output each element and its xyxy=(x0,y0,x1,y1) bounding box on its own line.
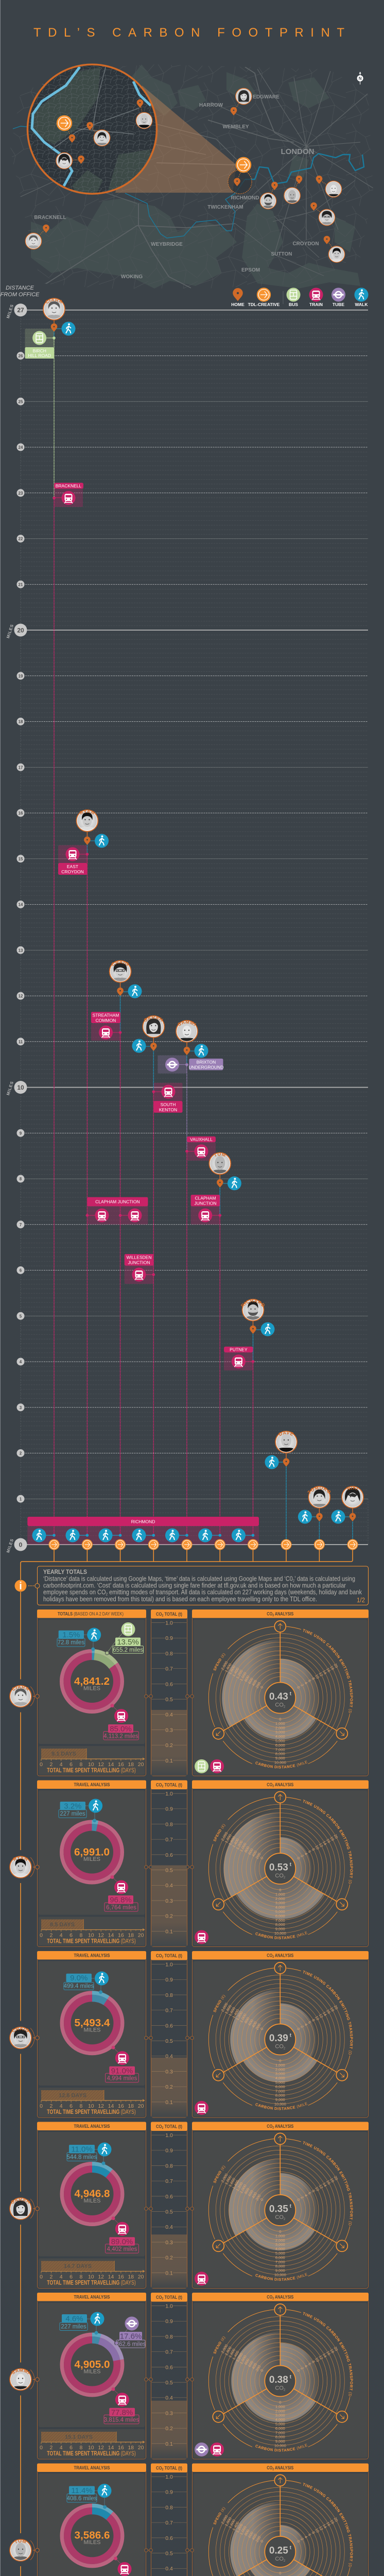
mile markers: 15 xyxy=(19,857,23,861)
avatar: CRAIG xyxy=(12,2027,29,2032)
magnifier circle xyxy=(26,62,160,196)
time bar: 8.5 DAYS xyxy=(50,1922,75,1928)
avatar xyxy=(9,2533,39,2566)
polar chart xyxy=(208,2133,354,2282)
column: CO2 total 0.53 xyxy=(151,1791,187,1946)
callout: walk: 227 miles xyxy=(61,2324,86,2330)
mile markers: MILES xyxy=(6,1538,14,1553)
person: Richard route: RICHARD xyxy=(241,1299,265,1308)
row: Ciara: 2 xyxy=(162,1615,164,1618)
TDL office markers xyxy=(57,115,251,173)
person: Dave route xyxy=(265,1431,298,1469)
row: Ciara: CO xyxy=(267,1612,274,1617)
callout: tube xyxy=(114,2316,146,2348)
column: CO2 total 0.43 xyxy=(151,1620,187,1776)
polar chart: t xyxy=(290,1691,292,1697)
person: Tom route: TOM xyxy=(213,1153,225,1157)
row: Sarah: ANALYSIS xyxy=(274,2124,293,2129)
person: Craig route: STREATHAM xyxy=(93,1013,119,1018)
map place labels: HARROW xyxy=(199,103,223,108)
info box: yearly totals: 2 xyxy=(293,1580,294,1583)
polar chart xyxy=(208,1962,354,2111)
polar chart: 0.38 xyxy=(269,2375,288,2385)
callout: train: 77.8% xyxy=(111,2408,133,2417)
row: Tom: ANALYSIS xyxy=(274,2465,293,2470)
row: Tom: 2 xyxy=(162,2468,164,2471)
callout: train: 3,815.4 miles xyxy=(104,2417,139,2424)
mile markers: 26 xyxy=(19,353,23,359)
axis heading: distance from office xyxy=(1,285,40,298)
map avatars xyxy=(25,88,345,263)
person: Dave route: DAVE xyxy=(278,1431,293,1436)
polar chart: t xyxy=(290,2033,292,2038)
icon: north compass: N xyxy=(359,76,362,81)
person: Ryan route: CROYDON xyxy=(61,869,84,874)
donut chart: 5,493.4 xyxy=(74,2018,110,2029)
polar chart: 0.43 xyxy=(269,1691,288,1702)
time bar xyxy=(40,2090,144,2115)
legend: HOME xyxy=(231,302,245,307)
mile markers: 16 xyxy=(19,811,23,816)
donut chart: 3,586.6 xyxy=(74,2530,110,2541)
donut chart: MILES xyxy=(83,1686,100,1692)
row: Sarah: CO xyxy=(156,2124,163,2129)
mode icons xyxy=(195,2443,224,2456)
donut chart xyxy=(62,1822,122,1883)
person: Ciara route: CIARA xyxy=(45,299,62,304)
mile markers: 25 xyxy=(19,399,23,404)
station: Clapham Junction shared xyxy=(86,1197,148,1225)
callout: walk xyxy=(60,2312,104,2335)
map place labels xyxy=(34,94,319,280)
mile markers: 20 xyxy=(17,626,24,634)
polar chart: 0.53 xyxy=(269,1862,288,1873)
mile markers: 6 xyxy=(20,1268,22,1273)
legend: BUS xyxy=(289,302,298,307)
callout: train xyxy=(106,2216,138,2253)
column: CO2 total 0.38 xyxy=(151,2303,187,2459)
person: Ryan route xyxy=(58,809,109,875)
polar chart: t xyxy=(290,2374,292,2380)
callout: walk: 4.6% xyxy=(65,2314,83,2324)
row: Tom: CO xyxy=(267,2465,274,2470)
person: Ryan route: EAST xyxy=(67,864,78,869)
mile markers: 27 xyxy=(17,307,24,314)
row: Sarah: CO xyxy=(267,2124,274,2129)
person: Sammi route xyxy=(158,1020,223,1161)
TDL office markers on axis xyxy=(48,1539,358,1550)
callout: walk: 72.8 miles xyxy=(58,1639,84,1646)
arrow: connector from office to panels xyxy=(21,1550,353,2576)
row: Sarah: 2 xyxy=(162,2127,164,2130)
time bar: 15.1 DAYS xyxy=(65,2434,93,2440)
person: Ciara route xyxy=(25,298,83,507)
row: Craig: CO xyxy=(156,1953,163,1958)
callout: train: 4,402 miles xyxy=(107,2246,137,2252)
row: Craig: 2 xyxy=(272,1956,274,1959)
row: Ryan: ANALYSIS xyxy=(274,1782,293,1787)
map pins and dotted links xyxy=(33,96,337,254)
person: Tom route: CLAPHAM xyxy=(195,1195,216,1200)
mile markers: 10 xyxy=(17,1084,24,1091)
row: Sarah xyxy=(9,2122,369,2289)
callout: train xyxy=(103,1704,138,1740)
polar chart xyxy=(208,1791,354,1940)
time bar: 14.7 DAYS xyxy=(64,2263,92,2269)
donut chart xyxy=(62,2505,123,2566)
row: Sammi: TOTAL (t) xyxy=(163,2295,182,2300)
avatar: SAMMI xyxy=(11,2369,30,2374)
polar chart: CO xyxy=(275,2214,284,2221)
row: Sammi: 2 xyxy=(162,2298,164,2301)
polar chart: 0.39 xyxy=(269,2033,288,2044)
polar chart: 2 xyxy=(284,2560,286,2563)
mile markers: 9 xyxy=(20,1131,22,1136)
callout: walk xyxy=(67,2142,111,2165)
callout: walk xyxy=(59,1799,102,1822)
map place labels: WEMBLEY xyxy=(222,124,249,130)
dotted zoom circle: Richmond xyxy=(228,170,252,194)
heading: TRAVEL ANALYSIS xyxy=(74,1953,110,1958)
avatar: TOM xyxy=(14,2539,27,2544)
icon: info: i xyxy=(19,1581,22,1592)
person: Sarah route xyxy=(125,1015,182,1284)
row: Ciara xyxy=(9,1609,369,1776)
callout: walk: 11.0% xyxy=(71,2145,93,2154)
callout: train: 6,764 miles xyxy=(106,1905,136,1911)
callout: train: 85.0% xyxy=(110,1725,132,1733)
person: Sarah route: JUNCTION xyxy=(128,1260,150,1265)
mode icon xyxy=(195,1930,208,1944)
title: TDL’S CARBON FOOTPRINT xyxy=(33,26,344,40)
avatar xyxy=(9,1680,40,1713)
polar chart: 2 xyxy=(284,2388,286,2392)
row: Ryan: TOTAL (t) xyxy=(163,1783,182,1788)
callout: train xyxy=(108,2556,141,2576)
info box: yearly totals: holidays have been removed from this total) and is based on each employee travelling only to the TDL office. xyxy=(43,1596,317,1603)
axis heading: distance from office: DISTANCE xyxy=(6,285,34,291)
avatar xyxy=(9,1850,40,1883)
callout: walk xyxy=(57,1628,101,1651)
row: Sarah: 2 xyxy=(272,2127,274,2130)
callout: walk xyxy=(64,1971,109,1994)
mile markers: 2 xyxy=(20,1451,22,1456)
avatar xyxy=(9,2021,40,2054)
row: Ryan: CO xyxy=(267,1782,274,1787)
mile markers: 11 xyxy=(19,1040,23,1044)
callout: train xyxy=(104,1875,138,1911)
map place labels: LONDON xyxy=(281,147,314,156)
callout: walk: 9.0% xyxy=(70,1974,88,1982)
map place labels: RICHMOND xyxy=(231,195,259,201)
row: Craig: 2 xyxy=(162,1956,164,1959)
callout: train: 4,994 miles xyxy=(107,2075,137,2081)
mile markers: 13 xyxy=(19,948,23,953)
mile markers: 22 xyxy=(19,537,23,541)
polar chart: 2 xyxy=(284,1876,286,1879)
transport routes xyxy=(54,330,353,1545)
row: Ciara: ANALYSIS xyxy=(274,1612,293,1617)
row: Sammi xyxy=(9,2293,369,2460)
mode icons xyxy=(195,1759,224,1773)
callout: walk: 3.2% xyxy=(64,1802,81,1810)
avatar: RYAN xyxy=(13,1856,28,1861)
callout: walk: 227 miles xyxy=(60,1811,85,1817)
polar chart: CO xyxy=(275,2385,284,2392)
map place labels: WEYBRIDGE xyxy=(151,242,183,247)
map place labels: CROYDON xyxy=(292,241,319,247)
column: CO2 total 0.25 xyxy=(151,2474,187,2576)
row: Tom xyxy=(9,2464,369,2576)
polar chart: 0.35 xyxy=(269,2204,288,2214)
callout: walk: 499.4 miles xyxy=(64,1984,94,1990)
mile markers: 8 xyxy=(20,1177,22,1181)
donut chart: MILES xyxy=(83,2027,101,2033)
legend: WALK xyxy=(355,302,368,307)
distance grid xyxy=(21,310,368,1545)
polar chart xyxy=(208,2304,354,2452)
polar chart: 0.25 xyxy=(269,2545,288,2556)
mile markers: 1 xyxy=(20,1497,22,1501)
axis heading: distance from office: FROM OFFICE xyxy=(1,292,40,298)
person: Craig route: COMMON xyxy=(96,1018,116,1023)
person: Richard route xyxy=(224,1299,275,1370)
row: Craig: ANALYSIS xyxy=(274,1953,293,1958)
map place labels: TWICKENHAM xyxy=(207,205,243,210)
callout: train xyxy=(104,2387,139,2424)
mile markers: 3 xyxy=(20,1405,22,1410)
mile markers: 12 xyxy=(19,994,23,998)
callout: tube: 862.6 miles xyxy=(116,2341,146,2347)
mile markers: 23 xyxy=(19,491,23,496)
callout: bus xyxy=(105,1622,143,1655)
heading: TRAVEL ANALYSIS xyxy=(74,2124,110,2129)
info box: yearly totals: data is calculated using xyxy=(298,1575,364,1583)
callout: train: 4,113.2 miles xyxy=(103,1733,138,1739)
person: Ciara route: BRACKNELL xyxy=(56,483,82,488)
person: Craig route: CRAIG xyxy=(111,961,129,965)
icon: info xyxy=(14,1580,40,1592)
mile markers: 0 xyxy=(19,1541,23,1549)
row: Tom: TOTAL (t) xyxy=(163,2466,182,2471)
mile markers: MILES xyxy=(6,1080,14,1096)
person: Sarah route: WILLESDEN xyxy=(126,1255,152,1260)
mile markers: 7 xyxy=(20,1223,22,1227)
avatar: CIARA xyxy=(12,1686,29,1691)
mile markers: 18 xyxy=(19,719,23,724)
callout: train: 89.0% xyxy=(111,2238,133,2246)
info box: yearly totals: ’ xyxy=(294,1575,295,1583)
person: Ciara route: BIRCH xyxy=(32,348,46,353)
person: Sarah route: SARAH xyxy=(144,1015,163,1022)
row: Ryan xyxy=(9,1781,369,1947)
map place labels: BRACKNELL xyxy=(34,215,66,221)
row: Craig: TOTAL (t) xyxy=(163,1953,182,1958)
polar chart: t xyxy=(290,1862,292,1868)
person: Richard route: PUTNEY xyxy=(230,1347,248,1352)
column: CO2 total 0.39 xyxy=(151,1962,187,2117)
polar chart: CO xyxy=(275,1873,284,1879)
callout: walk: 11.4% xyxy=(71,2486,93,2495)
mile markers: 21 xyxy=(19,582,23,587)
person: Niki route xyxy=(331,1486,364,1524)
row: Tom: CO xyxy=(156,2466,163,2471)
info box: yearly totals xyxy=(37,1566,369,1605)
person: Sarah route: KENTON xyxy=(159,1107,177,1112)
time bar xyxy=(40,1920,144,1944)
mile markers: 24 xyxy=(19,445,23,450)
legend: TRAIN xyxy=(309,302,323,307)
callout: train xyxy=(106,2046,138,2082)
row: Ryan: CO xyxy=(156,1783,163,1788)
row: Sarah: TOTAL (t) xyxy=(163,2124,182,2129)
person: Sammi route: UNDERGROUND xyxy=(188,1064,223,1070)
callout: train: 96.8% xyxy=(110,1896,132,1904)
station: Clapham Junction shared: CLAPHAM JUNCTION xyxy=(95,1199,140,1205)
row: Ryan: 2 xyxy=(162,1785,164,1788)
callout: bus: 13.5% xyxy=(117,1638,139,1647)
donut chart: MILES xyxy=(83,1856,100,1862)
row: Ryan: 2 xyxy=(272,1785,274,1788)
mile markers: 17 xyxy=(19,765,23,770)
time bar: 9.1 DAYS xyxy=(51,1751,76,1757)
row: Sammi: 2 xyxy=(272,2297,274,2300)
person: Sammi route: BRIXTON xyxy=(197,1059,216,1064)
person: Craig route xyxy=(91,960,142,1041)
map place labels: SUTTON xyxy=(271,251,292,257)
info box: yearly totals: YEARLY TOTALS xyxy=(43,1568,87,1575)
person: Sammi route: VAUXHALL xyxy=(190,1137,213,1142)
donut chart xyxy=(62,1651,122,1711)
map place labels: WOKING xyxy=(121,274,143,280)
donut chart xyxy=(62,2334,123,2395)
donut chart: 4,905.0 xyxy=(74,2359,110,2370)
time bar xyxy=(40,2261,144,2286)
polar chart: CO xyxy=(275,1702,284,1708)
mile markers: 4 xyxy=(20,1360,22,1364)
info box: yearly totals: carbonfootprint.com. ‘Cost’ data is calculated using single fare finder at tfl.gov.uk and is based on how much a particular xyxy=(43,1582,346,1589)
mile markers: MILES xyxy=(6,303,14,319)
avatar xyxy=(9,2192,40,2225)
mode icon xyxy=(195,2101,208,2115)
station: Richmond: RICHMOND xyxy=(131,1519,155,1524)
row: Sammi: CO xyxy=(267,2295,274,2300)
heading: totals: TOTALS (BASED ON A 2 DAY WEEK) xyxy=(58,1612,124,1617)
polar chart xyxy=(208,1621,354,1769)
donut chart: 4,946.8 xyxy=(74,2189,110,2200)
legend: TUBE xyxy=(333,302,344,307)
map place labels: EDGWARE xyxy=(253,94,280,100)
row: Ciara: CO xyxy=(156,1612,163,1617)
person: Tom route: JUNCTION xyxy=(195,1200,216,1206)
mile markers: 5 xyxy=(20,1314,22,1318)
mile markers xyxy=(6,303,27,1553)
mile markers: 14 xyxy=(19,903,23,907)
info box: yearly totals: ‘Distance’ data is calculated using Google Maps, ‘time’ data is calculated using Google Maps and ‘C0 xyxy=(43,1575,330,1583)
polar chart: CO xyxy=(275,2556,284,2562)
polar chart: 2 xyxy=(284,2047,286,2050)
legend xyxy=(231,287,369,307)
polar chart: t xyxy=(290,2545,292,2551)
mile markers: MILES xyxy=(6,623,14,639)
row: Sammi: CO xyxy=(156,2295,163,2300)
polar chart: CO xyxy=(275,2043,284,2049)
callout: bus: 655.2 miles xyxy=(113,1647,143,1653)
column: CO2 total 0.35 xyxy=(151,2132,187,2288)
donut chart: 4,841.2 xyxy=(74,1676,110,1687)
donut chart: MILES xyxy=(83,2198,101,2204)
donut chart: 6,991.0 xyxy=(74,1846,110,1858)
row: Ciara: 2 xyxy=(272,1614,274,1617)
person: Sarah route: SOUTH xyxy=(161,1102,176,1107)
heading: TRAVEL ANALYSIS xyxy=(74,1782,110,1787)
row: Sammi: ANALYSIS xyxy=(274,2295,293,2300)
heading: TRAVEL ANALYSIS xyxy=(74,2465,110,2470)
callout: walk xyxy=(67,2484,111,2509)
person: Tom route xyxy=(190,1152,241,1225)
callout: train: 91.0% xyxy=(111,2066,133,2075)
callout: walk: 1.5% xyxy=(62,1631,80,1639)
info box: yearly totals: emitting xyxy=(108,1589,129,1596)
icon: north compass xyxy=(357,72,363,84)
polar chart xyxy=(208,2475,354,2576)
station: Richmond xyxy=(27,1517,259,1545)
donut chart xyxy=(62,2164,123,2224)
info box: yearly totals: 2 xyxy=(106,1593,108,1596)
person: Sammi route: SAMMI xyxy=(178,1021,196,1026)
avatar xyxy=(9,2363,40,2396)
row: Tom: 2 xyxy=(272,2468,274,2471)
person: Ryan route: RYAN xyxy=(79,810,95,815)
time bar xyxy=(40,2432,144,2457)
info box: yearly totals: employee spends on CO xyxy=(43,1589,114,1596)
heading: TRAVEL ANALYSIS xyxy=(74,2295,110,2300)
row: Craig xyxy=(9,1951,369,2117)
person: Ciara route: HILL ROAD xyxy=(28,353,51,358)
avatar: SARAH xyxy=(11,2198,30,2204)
callout: walk: 408.6 miles xyxy=(67,2496,97,2502)
map: London commuter area xyxy=(10,62,375,289)
callout: tube: 17.6% xyxy=(120,2332,142,2341)
polar chart: 2 xyxy=(284,1705,286,1708)
polar chart: 2 xyxy=(284,2218,286,2221)
mode icon xyxy=(195,2272,208,2285)
person: Tomoko route xyxy=(298,1486,330,1524)
legend: TDL-CREATIVE xyxy=(248,302,280,307)
cone: magnified zone xyxy=(115,86,236,193)
row: Ciara: TOTAL (t) xyxy=(163,1612,182,1617)
callout: walk: 544.8 miles xyxy=(67,2155,97,2161)
donut chart: MILES xyxy=(83,2539,101,2546)
time bar xyxy=(40,1749,144,1774)
donut chart xyxy=(62,1993,123,2054)
person: Niki route: NIKI xyxy=(347,1486,358,1490)
person: Tomoko route: TOMOKO xyxy=(307,1487,330,1494)
donut chart: MILES xyxy=(83,2369,101,2375)
polar chart: t xyxy=(290,2204,292,2209)
row: Craig: CO xyxy=(267,1953,274,1958)
info box: yearly totals: 1/2 xyxy=(357,1596,365,1604)
map place labels: EPSOM xyxy=(241,267,260,273)
time bar: 12.6 DAYS xyxy=(59,2093,86,2099)
mile markers: 19 xyxy=(19,674,23,679)
